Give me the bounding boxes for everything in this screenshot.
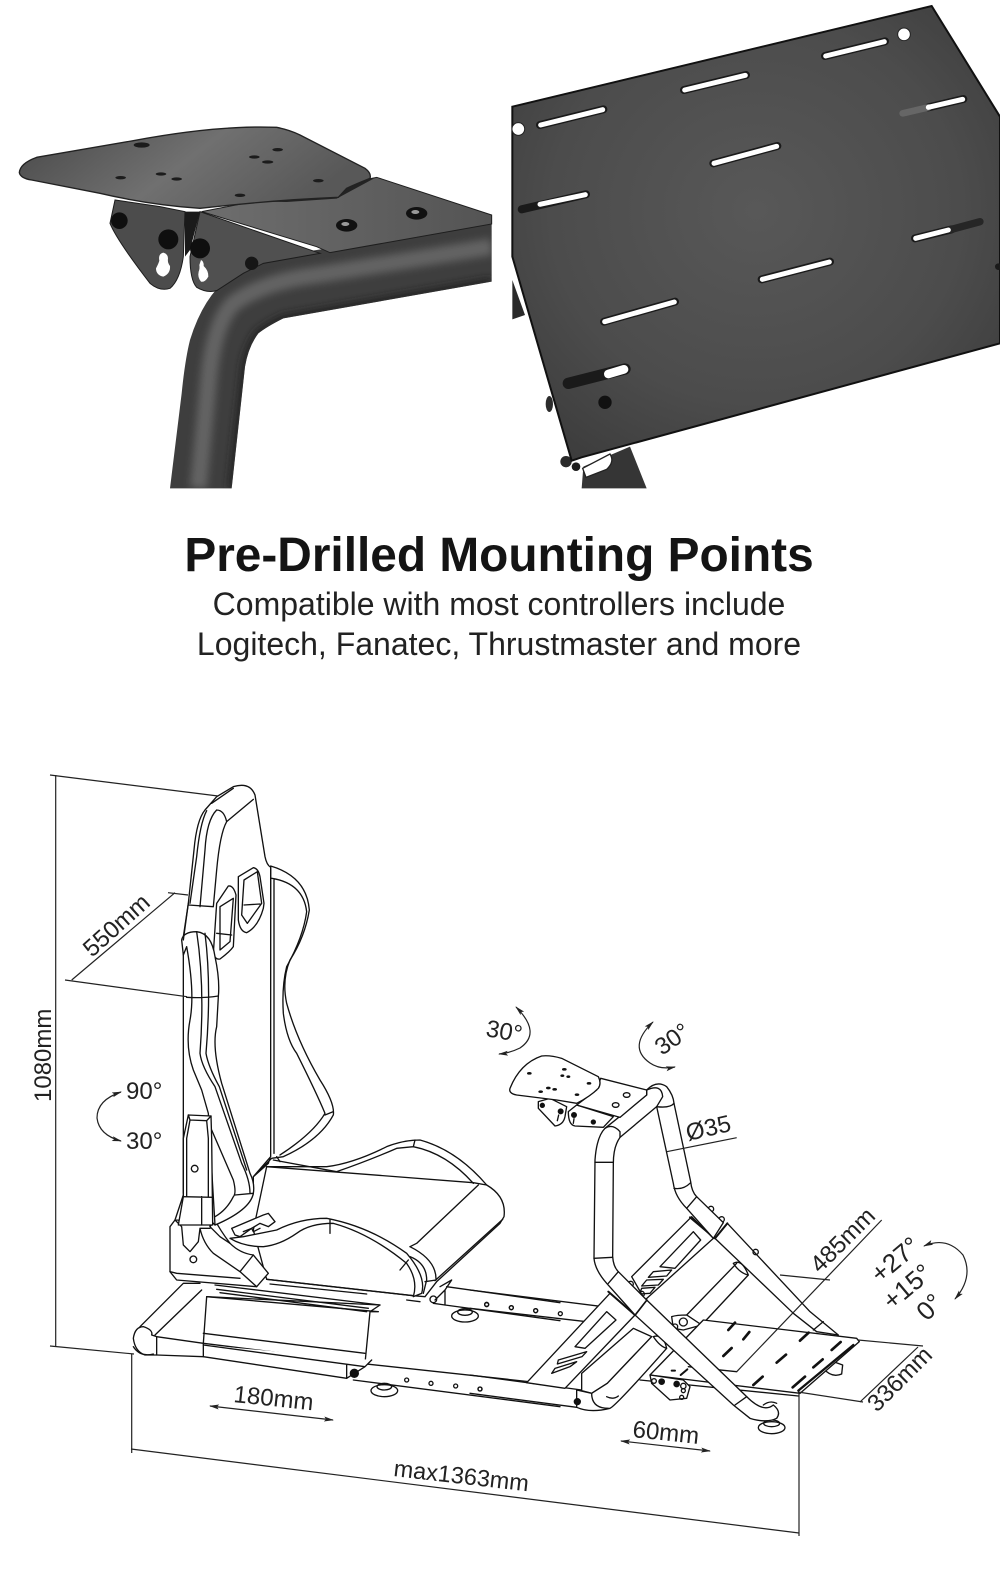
seat base	[170, 1140, 504, 1305]
backrest width label: 550mm	[78, 889, 155, 962]
feet	[758, 1362, 843, 1434]
tube	[170, 222, 492, 488]
struts under plate	[512, 280, 647, 488]
cross tubes	[574, 1262, 748, 1411]
wheel mount	[510, 1056, 647, 1127]
rear wing	[253, 866, 333, 1177]
pedal tilt labels: +27°	[865, 1231, 926, 1289]
dimension labels	[30, 889, 949, 1496]
plate	[512, 6, 1000, 461]
back leg	[690, 1206, 838, 1335]
wheel rotate labels	[484, 1015, 695, 1061]
rails under stand	[470, 1290, 603, 1407]
lower mount bracket	[650, 1369, 690, 1400]
lower mount plates	[527, 1217, 713, 1388]
top plate	[19, 127, 370, 208]
pedal slide label: 60mm	[631, 1416, 701, 1450]
front leg	[608, 1281, 779, 1421]
back shell	[183, 785, 271, 1225]
total length label: max1363mm	[392, 1455, 530, 1496]
foot	[371, 1383, 398, 1397]
title: Pre-Drilled Mounting Points	[184, 529, 814, 582]
side bolster	[182, 903, 254, 1225]
slider bracket	[203, 1285, 380, 1378]
pedal tilt labels: +15°	[877, 1258, 938, 1316]
upright bracket	[178, 1115, 213, 1225]
plate depth label: 485mm	[805, 1203, 881, 1278]
recline angle labels	[126, 1078, 162, 1155]
subtitle	[197, 586, 801, 662]
pedal tilt labels: 0°	[910, 1287, 949, 1326]
seat back	[178, 785, 333, 1225]
subtitle: Logitech, Fanatec, Thrustmaster and more	[197, 626, 801, 662]
photo: pedal plate close-up	[511, 4, 1000, 488]
headrest slots	[213, 868, 264, 959]
slots	[512, 28, 980, 409]
seat cushion	[230, 1140, 504, 1305]
heading block	[184, 529, 814, 662]
slide label: 180mm	[232, 1381, 315, 1416]
wheel rotate labels: 30°	[484, 1015, 524, 1048]
recline angle labels: 30°	[126, 1128, 162, 1155]
plate width label: 336mm	[862, 1342, 938, 1417]
pedal plate	[640, 1320, 859, 1396]
pedal tilt labels	[865, 1231, 949, 1326]
wheel rotate labels: 30°	[650, 1018, 695, 1061]
recliner bracket	[170, 1195, 268, 1287]
subtitle: Compatible with most controllers include	[213, 586, 785, 622]
photo: wheel mount close-up	[18, 126, 492, 488]
wheel stand	[470, 1056, 859, 1434]
tube diameter label: Ø35	[683, 1110, 734, 1147]
height label: 1080mm	[30, 1009, 57, 1102]
dimension lines	[50, 775, 967, 1536]
mounting bracket	[110, 177, 492, 291]
upright tube	[594, 1084, 723, 1315]
base rails and seat slider	[133, 1283, 560, 1407]
recline angle labels: 90°	[126, 1078, 162, 1105]
foot	[452, 1309, 478, 1322]
